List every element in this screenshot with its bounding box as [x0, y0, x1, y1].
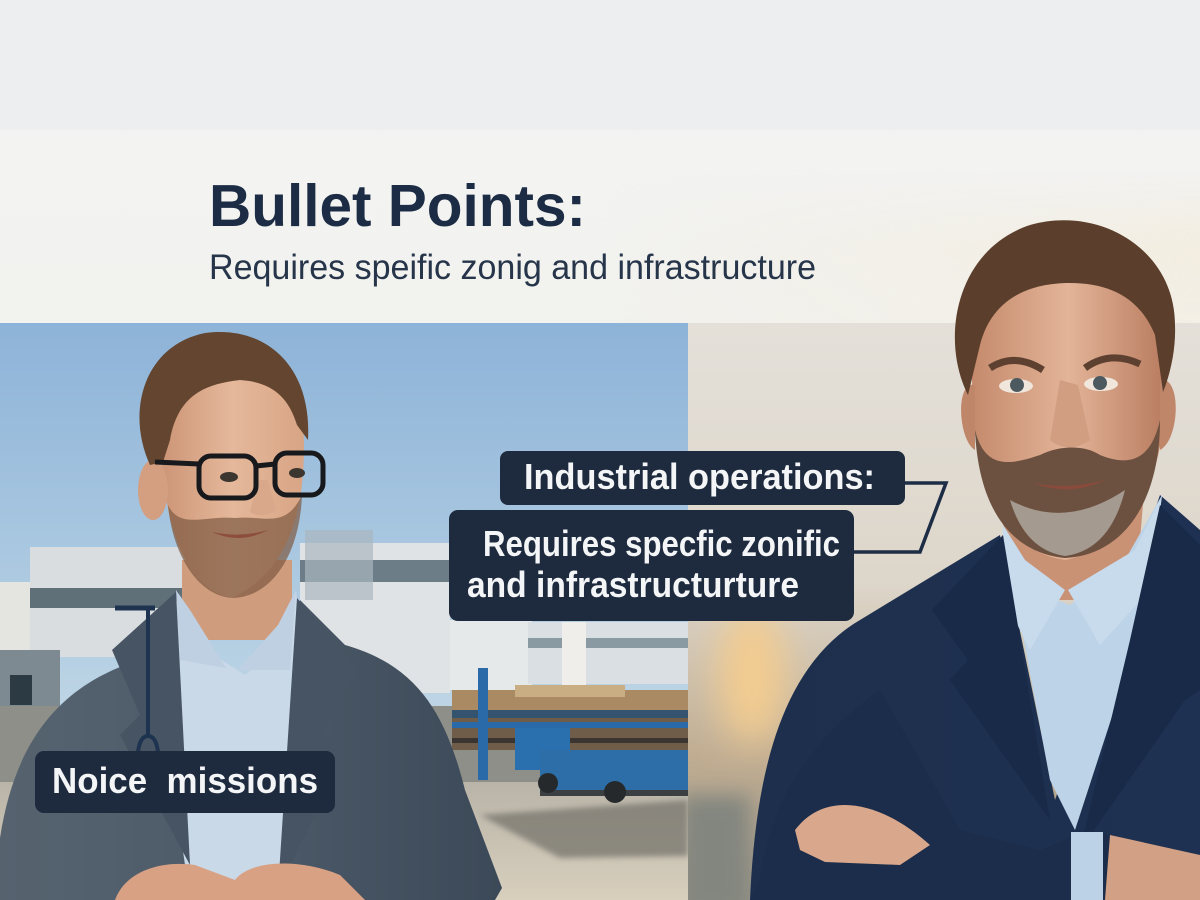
blue machinery	[452, 668, 688, 803]
person: right man in navy suit	[750, 220, 1200, 900]
subtitle: Requires speific zonig and infrastructure	[209, 248, 816, 287]
mouth	[1033, 480, 1105, 489]
header background	[868, 186, 1200, 323]
suit	[750, 495, 1200, 900]
callout: requires specific zoning	[449, 510, 854, 621]
face	[160, 365, 304, 598]
building: left warehouse	[0, 547, 200, 708]
eyes	[220, 468, 305, 482]
callout: noice missions: Noice missions	[52, 760, 318, 801]
callout: requires specific zoning: Requires specfic zonific	[483, 523, 840, 564]
callout: noice missions	[35, 751, 335, 813]
shirt	[1003, 495, 1162, 830]
lapels	[112, 592, 358, 890]
person: left man with glasses	[0, 332, 502, 900]
callout: requires specific zoning: and infrastructurture	[467, 564, 799, 605]
neck	[182, 560, 292, 640]
ground	[0, 706, 688, 782]
face	[972, 262, 1165, 560]
building: distant plant	[528, 622, 688, 686]
nose	[1050, 380, 1090, 448]
timber stacks	[452, 685, 688, 750]
connector: left callout stem	[115, 606, 158, 752]
forearm hand	[1105, 835, 1200, 900]
building: centre factory	[300, 530, 532, 693]
neck	[1003, 480, 1145, 600]
ear	[138, 460, 168, 520]
callout: industrial operations: Industrial operations:	[524, 456, 875, 497]
lapels	[932, 505, 1200, 850]
right hand	[795, 805, 930, 865]
hair	[139, 332, 308, 465]
cuff	[1071, 832, 1103, 900]
beard	[168, 495, 302, 598]
connector: right callout bracket	[850, 483, 946, 552]
hair	[955, 220, 1175, 395]
glasses	[155, 453, 323, 498]
beard	[975, 420, 1160, 558]
nose	[250, 480, 276, 516]
title: Bullet Points:	[209, 173, 586, 239]
yard pavement	[0, 782, 688, 900]
hands	[115, 864, 365, 900]
shirt	[170, 590, 305, 900]
panel: industrial site photo	[0, 323, 688, 900]
ears	[961, 380, 1176, 450]
panel: studio backdrop	[680, 323, 1200, 900]
eyes	[990, 358, 1140, 393]
blazer	[0, 590, 502, 900]
callout: industrial operations	[500, 451, 905, 505]
mouth	[212, 530, 268, 538]
crossed arms	[750, 690, 1200, 900]
